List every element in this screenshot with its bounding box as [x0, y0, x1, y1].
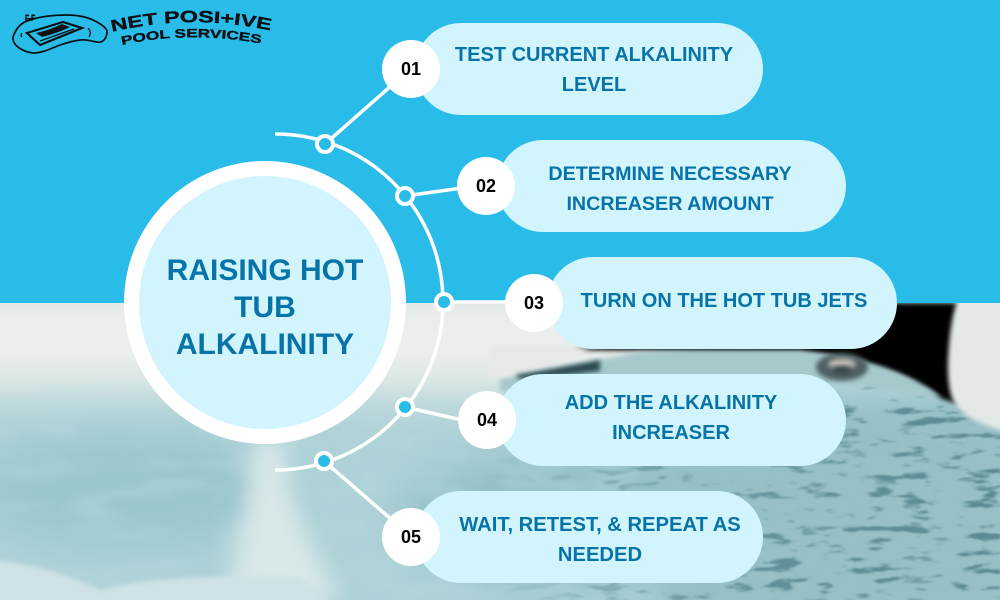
- foam plume centre: [225, 440, 340, 600]
- step 4 text: ADD THE ALKALINITY: [565, 392, 777, 414]
- step 2 text: [548, 163, 792, 215]
- step 3 pill: [547, 257, 897, 349]
- node 1: [317, 136, 333, 152]
- step 2 pill: [497, 140, 846, 232]
- step 5 text: NEEDED: [558, 544, 642, 566]
- node 5: [316, 453, 332, 469]
- background: blue top band and hot tub photo: [0, 303, 1000, 600]
- step 1 text: TEST CURRENT ALKALINITY: [455, 44, 733, 66]
- title circle: TUB: [234, 291, 296, 324]
- step 4 number: 04: [477, 410, 497, 430]
- step 4 number: [458, 391, 516, 449]
- node 2: [397, 188, 413, 204]
- right: water: [660, 400, 1000, 600]
- step 2 number: 02: [476, 176, 496, 196]
- node 3: [436, 294, 452, 310]
- title circle: [124, 161, 406, 444]
- title circle: ALKALINITY: [176, 328, 354, 361]
- step 1 number: 01: [401, 59, 421, 79]
- step 1 text: [455, 44, 733, 96]
- foam bottom left: [0, 560, 350, 600]
- dark cavity upper right: [570, 303, 965, 405]
- step 5 pill: [415, 491, 763, 583]
- icon: pool with float: [13, 15, 107, 53]
- logo text: POOL SERVICES: [121, 28, 262, 45]
- node 4: [397, 399, 413, 415]
- pale foam top left: [0, 280, 660, 392]
- pale tub rim: [500, 351, 942, 398]
- step 1 number: [382, 40, 440, 98]
- teal water left: [0, 435, 290, 545]
- step 1 pill: [415, 23, 763, 115]
- step 3 text: TURN ON THE HOT TUB JETS: [581, 290, 867, 312]
- step 5 number: 05: [401, 527, 421, 547]
- step 5 text: WAIT, RETEST, & REPEAT AS: [459, 514, 741, 536]
- step 3 number: [505, 274, 563, 332]
- step 2 number: [457, 157, 515, 215]
- step 4 text: INCREASER: [612, 422, 730, 444]
- step 5 number: [382, 508, 440, 566]
- jet nozzle: [816, 353, 868, 381]
- logo: Net Positive Pool Services: [12, 10, 272, 54]
- step 2 text: DETERMINE NECESSARY: [548, 163, 792, 185]
- step 2 text: INCREASER AMOUNT: [566, 193, 774, 215]
- step 5 text: [459, 514, 741, 566]
- logo text: NET POSI+IVE: [110, 10, 272, 32]
- logo text: [110, 10, 272, 45]
- title circle: RAISING HOT: [167, 254, 363, 287]
- step 1 text: LEVEL: [562, 74, 626, 96]
- step 4 text: [565, 392, 777, 444]
- step 3 number: 03: [524, 293, 544, 313]
- step 4 pill: [497, 374, 846, 466]
- white headrest right: [948, 298, 1000, 432]
